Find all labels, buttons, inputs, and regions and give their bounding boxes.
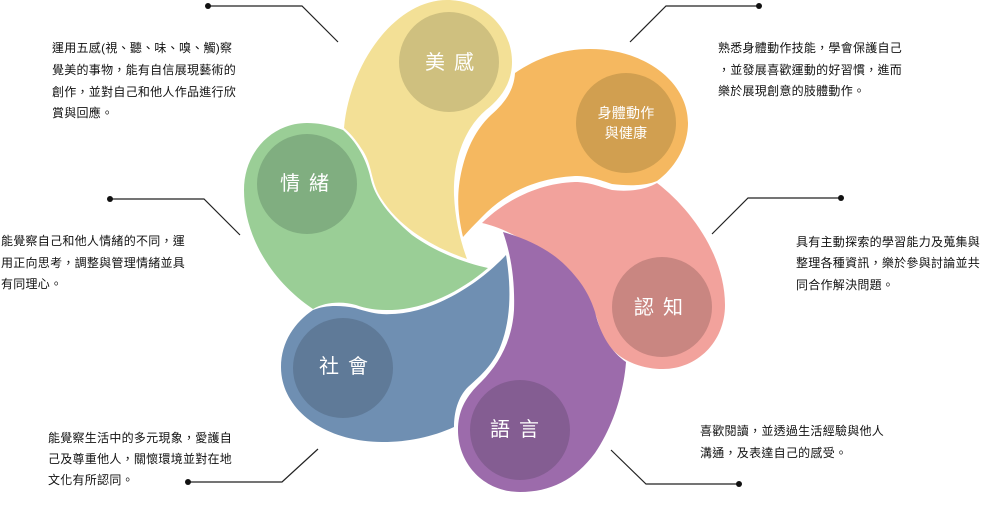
leader line: 情緒 [107,196,240,235]
text block: 美感: 創作，並對自己和他人作品進行欣 [52,85,236,99]
leader line: 美感 [205,3,338,42]
text block: 語言: 喜歡閱讀，並透過生活經驗與他人 [700,423,884,438]
label: 情緒: 情緒 [280,172,338,195]
label: 身體動作與健康: 身體動作 [598,105,654,121]
petal: 美感 [344,0,512,259]
text block: 美感: 運用五感(視、聽、味、嗅、觸)察 [52,40,232,55]
text block: 社會: 能覺察生活中的多元現象，愛護自 [48,430,232,445]
text block: 社會: 己及尊重他人，關懷環境並對在地 [48,451,232,466]
text block: 美感: 賞與回應。 [52,105,113,120]
circle: 情緒 [257,134,357,234]
leader line: 認知 [712,195,844,234]
text block: 社會: 文化有所認同。 [48,472,134,487]
petal: 語言 [458,232,626,492]
leader line: 語言 [611,450,742,487]
leader line: 社會 [185,449,318,485]
petal: 社會 [281,255,509,442]
text block: 情緒: 有同理心。 [1,277,62,291]
label: 語言: 語言 [490,418,548,441]
text block: 身體動作與健康 [718,40,902,98]
text block: 身體動作與健康: 樂於展現創意的肢體動作。 [718,83,865,98]
text block: 語言 [700,423,884,460]
text block: 身體動作與健康: 熟悉身體動作技能，學會保護自己 [718,40,902,55]
text block: 美感: 覺美的事物，能有自信展現藝術的 [52,62,236,77]
leader line: 身體動作與健康 [630,3,762,42]
petal: 身體動作與健康 [458,49,688,237]
text block: 情緒: 用正向思考，調整與管理情緒並具 [1,255,185,270]
circle: 美感 [399,12,499,112]
text block: 認知: 整理各種資訊，樂於參與討論並共 [796,255,980,270]
circle: 身體動作與健康 [576,73,676,173]
text block: 語言: 溝通，及表達自己的感受。 [700,445,847,460]
text block: 認知: 具有主動探索的學習能力及蒐集與 [796,234,980,249]
text block: 身體動作與健康: ，並發展喜歡運動的好習慣，進而 [718,62,902,77]
label: 認知: 認知 [634,296,692,319]
text block: 情緒 [1,233,185,291]
text block: 美感 [52,40,236,120]
circle: 認知 [612,257,712,357]
petal: 身體動作與健康: 與健康 [605,125,647,141]
text block: 社會 [48,430,232,487]
text block: 認知 [796,234,980,292]
petal: 認知 [482,182,725,369]
petal: 情緒 [244,123,488,310]
label: 社會: 社會 [319,355,377,378]
circle: 社會 [293,318,393,418]
circle: 語言 [470,380,570,480]
text block: 情緒: 能覺察自己和他人情緒的不同，運 [1,233,185,248]
label: 美感: 美感 [425,51,483,74]
text block: 認知: 同合作解決問題。 [796,277,894,292]
